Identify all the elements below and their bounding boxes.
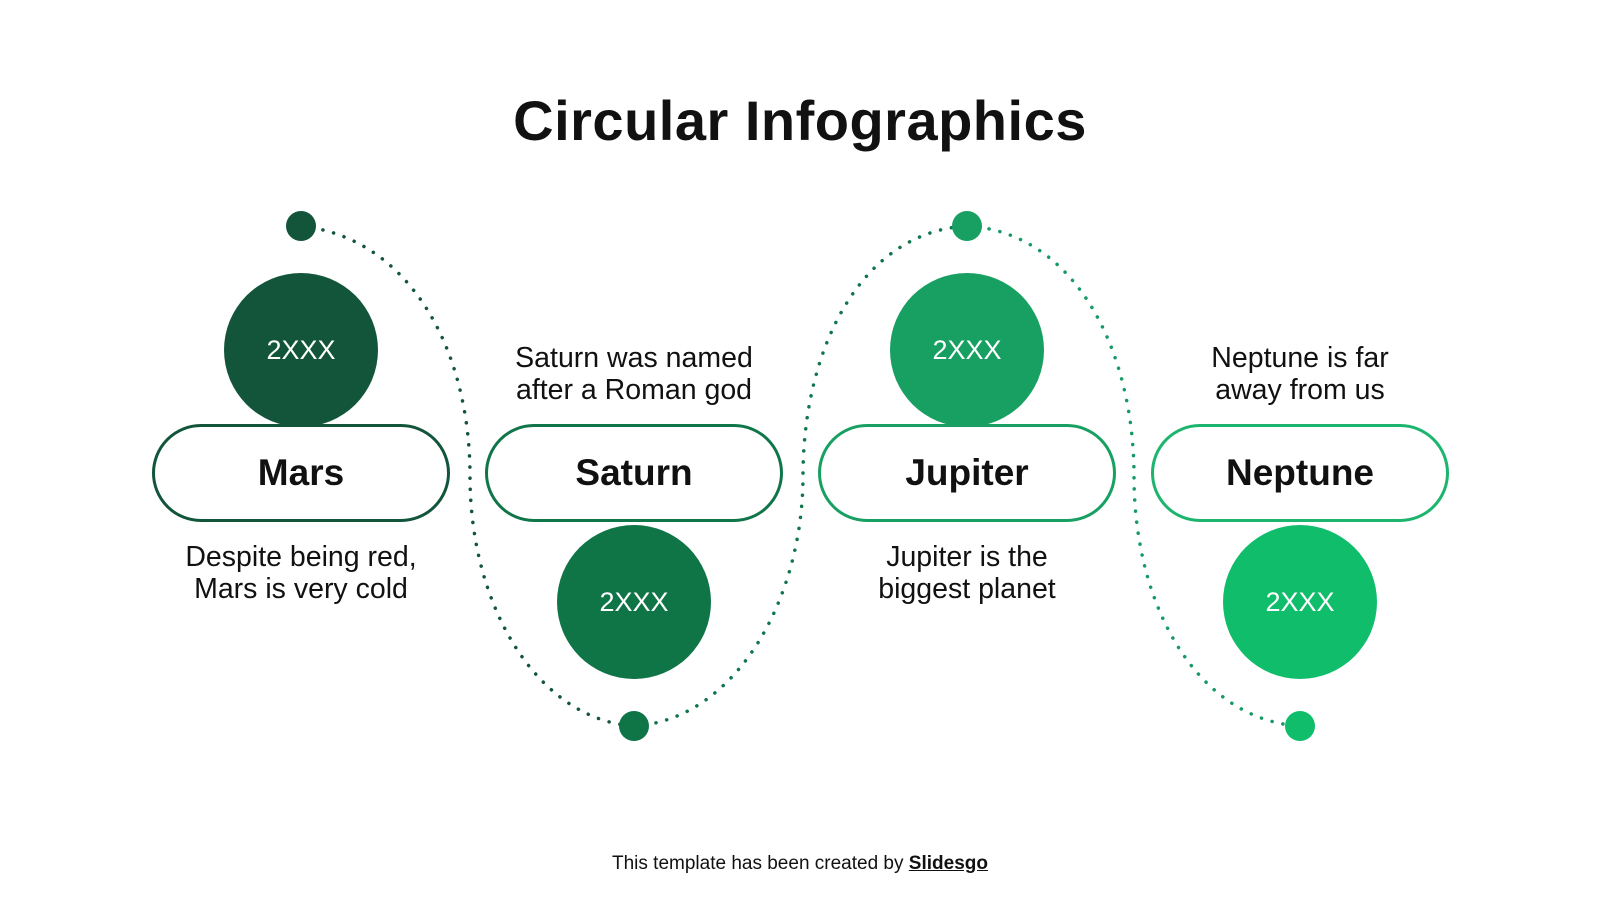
pill: jupiter	[818, 424, 1116, 522]
text: jupiter description: biggest planet	[878, 573, 1056, 605]
text: jupiter description: Jupiter is the	[886, 541, 1048, 573]
footer: This template has been created by Slidesgo	[612, 853, 988, 874]
text: saturn description: Saturn was named	[515, 342, 753, 374]
circle: jupiter year: 2XXX	[932, 335, 1002, 365]
text: neptune description	[1211, 342, 1389, 406]
circle: jupiter year	[890, 273, 1044, 427]
text: saturn description	[515, 342, 753, 406]
pill: neptune: Neptune	[1226, 452, 1374, 493]
circle: mars year: 2XXX	[266, 335, 336, 365]
dot: jupiter	[952, 211, 982, 241]
circle: saturn year: 2XXX	[599, 587, 669, 617]
pill: jupiter: Jupiter	[905, 452, 1029, 493]
circle: saturn year	[557, 525, 711, 679]
pill: mars: Mars	[258, 452, 344, 493]
text: mars description	[185, 541, 417, 605]
pill: saturn: Saturn	[575, 452, 693, 493]
pill: neptune	[1151, 424, 1449, 522]
text: mars description: Mars is very cold	[194, 573, 408, 605]
dot: saturn	[619, 711, 649, 741]
text: neptune description: Neptune is far	[1211, 342, 1389, 374]
text: neptune description: away from us	[1215, 374, 1385, 406]
circle: neptune year	[1223, 525, 1377, 679]
circle: mars year	[224, 273, 378, 427]
dot: mars	[286, 211, 316, 241]
text: mars description: Despite being red,	[185, 541, 417, 573]
dot: neptune	[1285, 711, 1315, 741]
circle: neptune year: 2XXX	[1265, 587, 1335, 617]
text: jupiter description	[878, 541, 1056, 605]
pill: saturn	[485, 424, 783, 522]
title: Circular Infographics	[513, 89, 1087, 152]
text: saturn description: after a Roman god	[516, 374, 752, 406]
pill: mars	[152, 424, 450, 522]
